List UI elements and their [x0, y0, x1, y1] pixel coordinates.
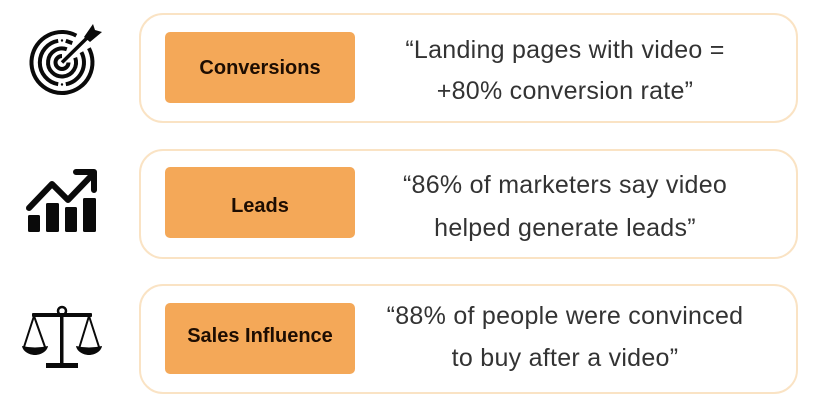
label: Leads: Leads	[231, 195, 289, 217]
panel: sales influence	[139, 284, 798, 394]
quote: conversions: +80% conversion rate”	[437, 77, 693, 105]
label: Leads	[165, 167, 355, 238]
quote: leads: helped generate leads”	[434, 214, 696, 242]
quote: conversions: “Landing pages with video =	[405, 36, 725, 64]
icon: target with arrow	[30, 24, 102, 95]
panel: conversions	[139, 13, 798, 123]
icon: balance scale	[22, 306, 102, 368]
quote: leads	[403, 171, 727, 242]
label: Sales Influence	[165, 303, 355, 374]
label: Sales Influence: Sales Influence	[187, 325, 333, 347]
quote: sales influence: to buy after a video”	[452, 344, 678, 372]
icon: growth chart	[26, 169, 97, 232]
label: Conversions: Conversions	[199, 57, 321, 79]
quote: conversions	[405, 36, 725, 105]
quote: sales influence	[387, 302, 743, 372]
quote: sales influence: “88% of people were convinced	[387, 302, 743, 330]
quote: leads: “86% of marketers say video	[403, 171, 727, 199]
label: Conversions	[165, 32, 355, 103]
panel: leads	[139, 149, 798, 259]
